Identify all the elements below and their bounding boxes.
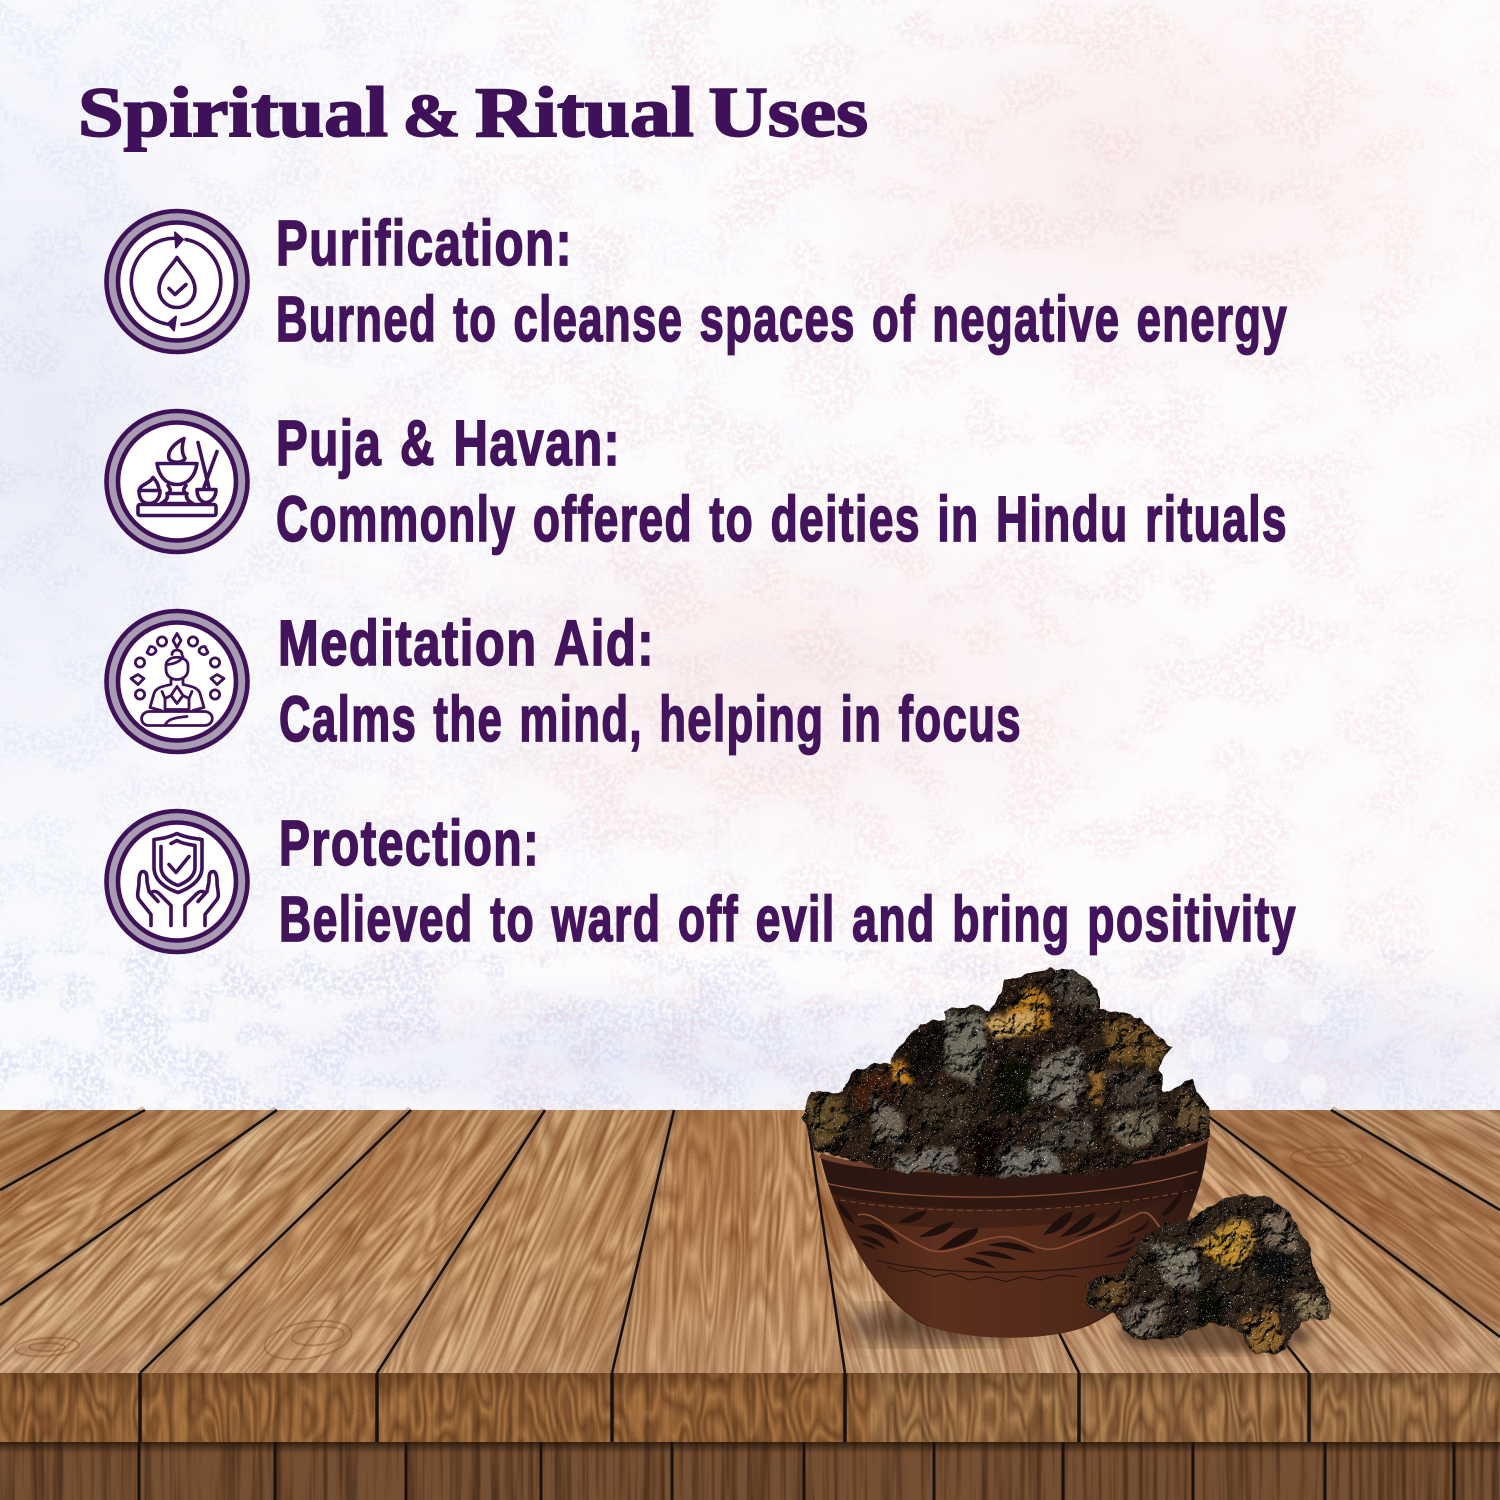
icon: meditating figure [106, 611, 248, 752]
icon: shield in hands [106, 811, 248, 952]
carved clay bowl [820, 1141, 1208, 1338]
icon: purification droplet [106, 211, 248, 352]
item: meditation aid [106, 607, 1022, 755]
loose resin cluster shadow [1115, 1317, 1315, 1353]
plank front edge [0, 1373, 1500, 1442]
item: protection [106, 807, 1297, 955]
table lower boards [0, 1442, 1500, 1500]
heading: meditation aid: Meditation Aid: [278, 607, 655, 679]
resin pile [795, 960, 1215, 1185]
heading: puja and havan: Puja & Havan: [276, 407, 621, 479]
item: purification [106, 207, 1288, 355]
title: Spiritual & Ritual Uses [78, 74, 868, 152]
loose resin cluster [1080, 1190, 1335, 1360]
product: bowl of resin [795, 960, 1335, 1360]
wooden table top [0, 1110, 1500, 1373]
icon: puja lamp and offerings [106, 411, 248, 552]
description: meditation aid: Calms the mind, helping in focus [279, 683, 1022, 755]
item: puja and havan [106, 407, 1288, 555]
marble background [0, 0, 1500, 1170]
heading: purification: Purification: [276, 207, 573, 279]
bowl shadow [845, 1305, 1025, 1345]
bowl rim [820, 1138, 1208, 1171]
heading: protection: Protection: [279, 807, 540, 879]
